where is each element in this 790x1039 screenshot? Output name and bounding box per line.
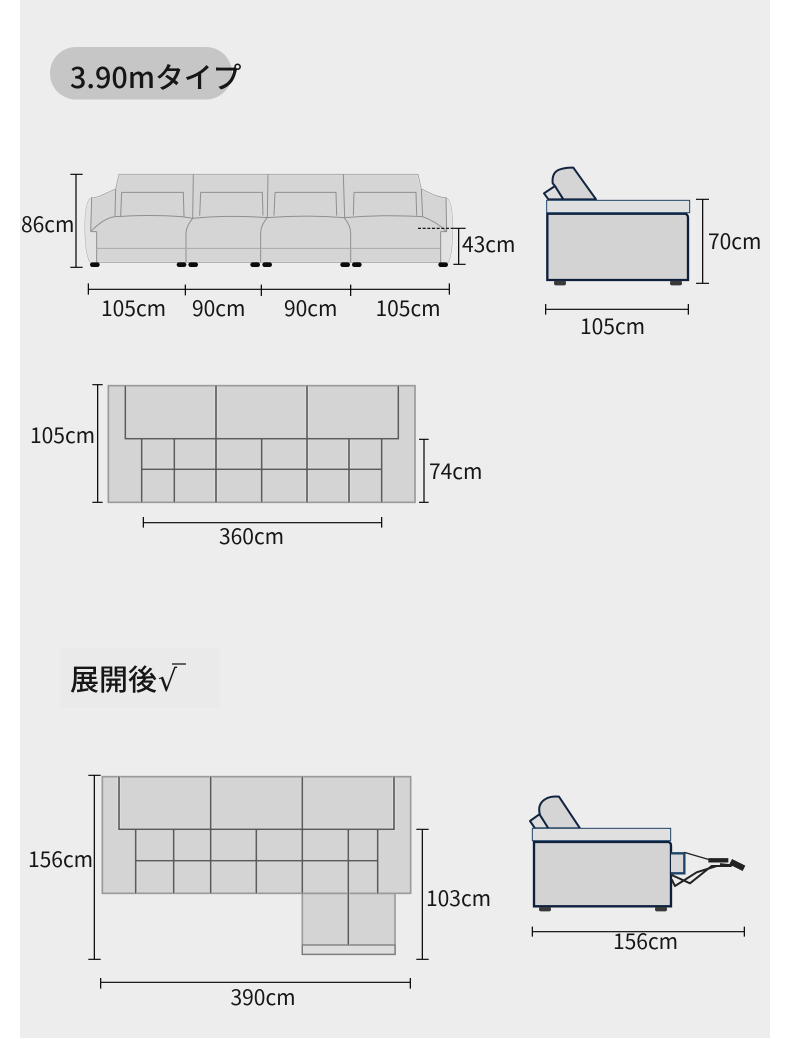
front view labels: 90cm xyxy=(192,293,245,323)
side view labels: 70cm xyxy=(708,226,761,256)
front view labels: 105cm xyxy=(376,293,441,323)
side view sofa drawing xyxy=(544,168,690,285)
heading: after unfolding: √ xyxy=(158,664,178,699)
heading: after unfolding: 展開後 xyxy=(70,657,157,699)
front view labels: 86cm xyxy=(21,209,74,239)
front view labels: 43cm xyxy=(462,229,515,259)
side view labels: 105cm xyxy=(580,311,645,341)
side view labels xyxy=(580,226,761,341)
top plan: unfolded xyxy=(102,777,411,954)
reclined side view drawing xyxy=(530,797,744,911)
heading: 3.90m type: 3.90mタイプ xyxy=(70,56,242,97)
side view dimension lines xyxy=(546,199,709,315)
top plan dimension lines xyxy=(92,385,429,528)
top plan labels xyxy=(30,420,482,551)
front view labels xyxy=(21,209,515,323)
unfolded plan labels: 103cm xyxy=(426,883,491,913)
reclined side view dimension line xyxy=(532,927,744,937)
front view sofa drawing xyxy=(85,174,453,267)
top plan labels: 360cm xyxy=(219,521,284,551)
front view labels: 90cm xyxy=(284,293,337,323)
top plan: 3.90m type xyxy=(108,386,415,502)
top plan labels: 74cm xyxy=(429,456,482,486)
heading: after unfolding xyxy=(60,648,220,708)
top plan labels: 105cm xyxy=(30,420,95,450)
reclined side view label: 156cm xyxy=(613,926,678,956)
heading: 3.90m type xyxy=(50,47,242,100)
unfolded plan dimension lines xyxy=(88,775,429,989)
front view labels: 105cm xyxy=(101,293,166,323)
unfolded plan labels xyxy=(28,844,491,1012)
unfolded plan labels: 156cm xyxy=(28,844,93,874)
unfolded plan labels: 390cm xyxy=(230,982,296,1012)
front view dimension lines xyxy=(70,174,466,296)
